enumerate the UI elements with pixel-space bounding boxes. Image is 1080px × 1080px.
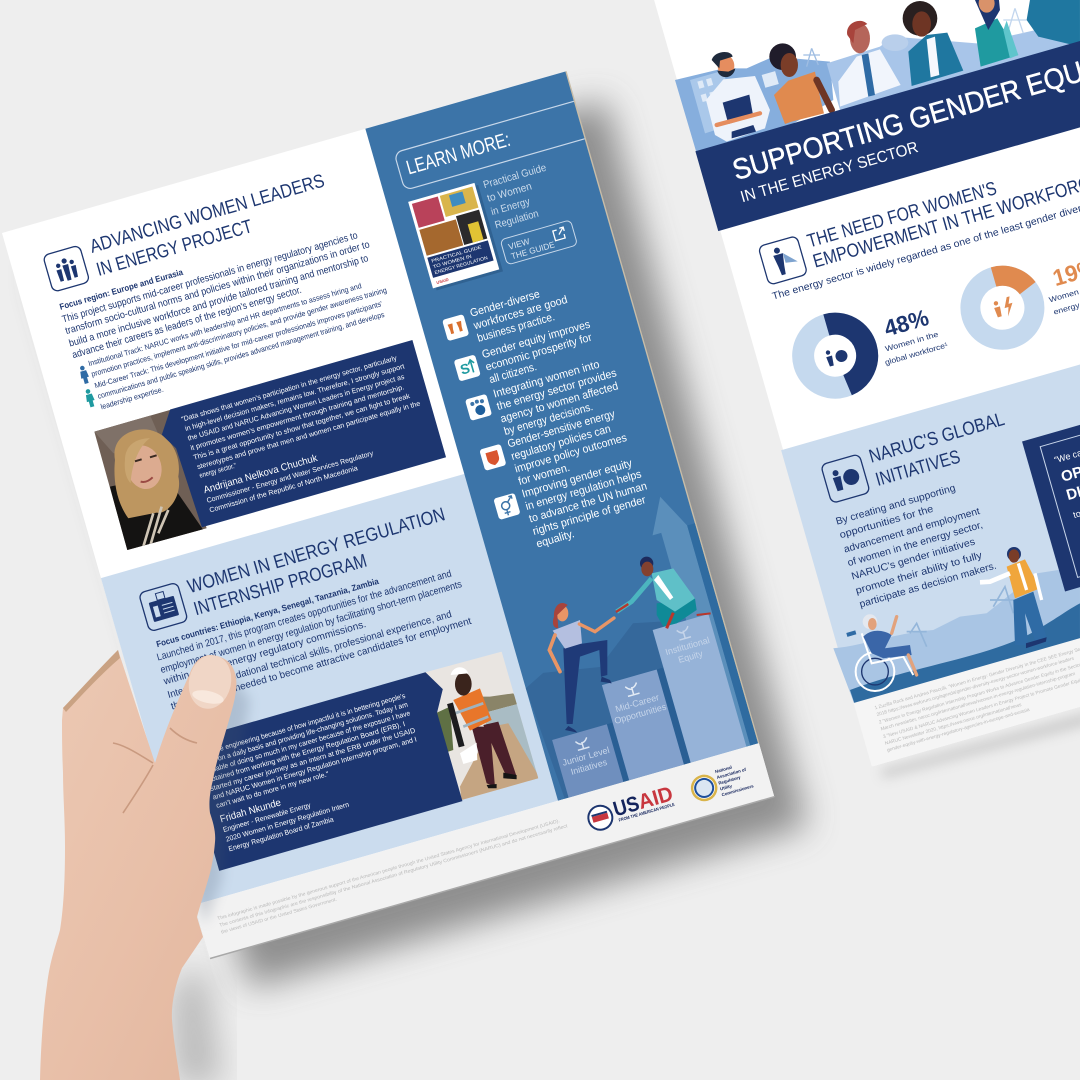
quote text: can't wait to do more in my new role.": [215, 770, 330, 810]
figure: climbing woman: [549, 603, 614, 733]
title banner: [695, 0, 1080, 231]
thumb shadow: [170, 672, 250, 925]
person: woman in hijab: [975, 0, 1018, 67]
step: mid-career: Mid-Career: [614, 692, 660, 714]
body text: By creating and supporting: [835, 483, 957, 528]
logo: NARUC: National: [714, 765, 732, 774]
guide title: Practical Guide: [482, 162, 548, 191]
body text: opportunities for the: [838, 504, 935, 541]
quote text: [180, 351, 424, 480]
quote box: [156, 340, 446, 531]
benefit: agency to women: Integrating women into: [492, 359, 601, 401]
footnotes: 2018 https://www.weforum.org/agenda/gender-diversity-energy-sector-women-workforce-leaders: [876, 656, 1075, 718]
attribution: [219, 779, 353, 853]
body text: within utilities' energy regulatory commissions.: [162, 619, 367, 688]
guide title: [482, 162, 559, 232]
attribution: Energy Regulation Board of Zambia: [228, 815, 335, 853]
step: institutional equity: [653, 614, 746, 763]
sidebar: learn more: [365, 70, 764, 801]
section: women in energy regulation background: [101, 473, 560, 905]
view the guide button: [500, 220, 578, 265]
hand holding page: [40, 650, 236, 1080]
body text: advancement and employment: [843, 506, 981, 556]
quote text: it promotes women's empowerment through training and mentorship.: [190, 383, 405, 452]
quote text: stereotypes and prove that men and women can participate equally in the: [196, 399, 421, 471]
donut chart: 48% women in global workforce: [796, 316, 875, 395]
guide title: to Women: [486, 180, 533, 205]
guide title: in Energy: [490, 195, 532, 218]
heading: IN ENERGY PROJECT: [94, 216, 255, 281]
heading: ADVANCING WOMEN LEADERS: [88, 171, 327, 258]
logo: USAID: US: [611, 792, 642, 821]
figure: reaching woman: [616, 557, 711, 628]
step: institutional equity: Institutional: [664, 635, 711, 657]
footnotes: 2 "Women in Energy Regulation Internship Program Works to Advance Gender Equity in the Sector": [878, 661, 1080, 726]
benefit: human rights: Improving gender equity: [521, 457, 634, 500]
body text: Interns gain foundational technical skills, professional experience, and: [166, 609, 453, 701]
donut chart: 19% women in energy workforce: [963, 268, 1042, 347]
benefit: human rights: to advance the UN human: [528, 480, 648, 525]
quote box: [1022, 335, 1080, 591]
quote text: "I chose engineering because of how impactful it is in bettering people's: [199, 692, 407, 758]
attribution: Commission of the Republic of North Macedonia: [208, 464, 359, 514]
benefit: agency to women: agency to women affected: [499, 380, 620, 426]
body text: This project supports mid-career professionals in energy regulatory agencies to: [61, 230, 359, 326]
track: mid-career: leadership expertise.: [100, 385, 165, 411]
quote text: and NARUC Women in Energy Regulation Internship program, and I: [212, 735, 418, 802]
body text: NARUC's gender initiatives: [850, 537, 976, 582]
benefit: human rights: equality.: [535, 528, 576, 550]
section: NARUC's global initiatives: [758, 279, 1080, 785]
person: bearded man with tablet: [706, 52, 770, 142]
benefit: economic prosperity: S: [458, 360, 472, 378]
benefit: gender-sensitive policies: [478, 407, 632, 496]
logo: NARUC: Association of: [716, 767, 747, 780]
subtitle: IN THE ENERGY SECTOR: [739, 139, 920, 206]
stat: 19%: [1040, 249, 1080, 317]
learn more box: [394, 101, 585, 190]
body text: participate as decision makers.: [858, 561, 998, 610]
heading: WOMEN IN ENERGY REGULATION: [185, 504, 448, 598]
photo: Andrijana Nelkova Chuchuk: [94, 410, 206, 550]
benefit: gender-diverse workforces: [441, 282, 573, 353]
benefit: agency to women: by energy decisions.: [503, 401, 594, 438]
quote text: [199, 692, 422, 810]
benefit: economic prosperity: economic prosperity for: [484, 332, 594, 374]
disclaimer: The contents of this infographic are the responsibility of the National Association of Regulatory Utility Commissioners (NARUC) and do not necessarily reflect: [219, 823, 569, 929]
illustration: landscape with wheelchair user and field worker: [833, 547, 1080, 720]
benefit: gender-sensitive policies: improve policy outcomes: [513, 432, 629, 476]
attribution: Commissioner - Energy and Water Services Regulatory: [206, 449, 375, 505]
body text: build a more inclusive workforce and provide tailored training and mentorship to: [68, 253, 370, 350]
track: institutional: Institutional Track: NARUC works with leadership and HR departments to assess hiring and: [87, 281, 363, 368]
icon: woman and globe: [821, 454, 870, 503]
body text: of women in the energy sector,: [846, 520, 984, 569]
quote text: the USAID and NARUC Advancing Women Leaders in Energy project as: [187, 373, 406, 443]
section: need for women's empowerment: [758, 140, 1080, 399]
person: woman in orange top: [769, 43, 832, 124]
stat: 48%: global workforce¹: [884, 340, 949, 367]
body text: [155, 567, 474, 713]
heading: [867, 409, 1014, 491]
quote box: [182, 669, 474, 871]
view the guide button: VIEW: [507, 236, 531, 252]
body text: transform socio-cultural norms and policies within their organizations in order to: [64, 239, 371, 337]
quote text: energy sector.": [199, 462, 238, 480]
heading: [88, 171, 334, 281]
footnotes: gender-equity-with-energy-regulatory-agencies-in-europe-and-eurasia: [886, 707, 1031, 754]
logo: NARUC: Regulatory: [718, 774, 742, 786]
illustration: diverse group of workers: [675, 0, 1080, 153]
footnotes: NARUC Newsletter 2020, https://www.naruc.org/international/news: [884, 702, 1023, 747]
quote text: This is a great opportunity to show that together, we can fight to break: [192, 392, 411, 462]
benefit: agency to women: the energy sector provides: [496, 367, 618, 413]
icon: ID badge: [139, 582, 188, 632]
stat: 48%: Women in the: [884, 330, 939, 353]
logo: NARUC: Commissioners: [721, 783, 755, 797]
step: mid-career: Opportunities: [613, 701, 668, 726]
attribution: 2020 Women in Energy Regulation Intern: [225, 801, 350, 844]
quote text: obtained from working with the Energy Regulation Board (ERB). I: [207, 720, 406, 784]
benefit: economic prosperity: Gender equity improves: [481, 319, 592, 361]
footnotes: [854, 532, 1080, 766]
benefit: agency to women: [464, 355, 626, 446]
logo: USAID: AID: [636, 782, 676, 814]
step: mid-career: [602, 668, 691, 780]
step: institutional equity: Equity: [677, 648, 704, 665]
benefit: gender-diverse workforces: Gender-diverse: [469, 288, 541, 320]
benefit: human rights: rights principle of gender: [531, 494, 647, 538]
icon: group of women leaders: [43, 245, 90, 292]
section: women in energy regulation internship: [137, 486, 594, 903]
attribution: Fridah Nkunde: [219, 797, 283, 825]
footnotes: March newsletter, naruc.org/international/news/women-in-energy-regulation-internship-program: [880, 671, 1076, 732]
focus region: Focus region: Europe and Eurasia: [58, 267, 184, 312]
heading: THE NEED FOR WOMEN'S: [805, 178, 999, 252]
step: junior level: [552, 723, 629, 798]
panel: front page of infographic: [609, 0, 1080, 785]
body text: employment of women in energy regulation by facilitating short-term placements: [159, 579, 463, 676]
quote text: in high-level decision makers, remains low. Therefore, I strongly support: [184, 362, 405, 433]
guide title: Regulation: [493, 208, 540, 232]
stat: 48%: [872, 301, 949, 367]
body text: Launched in 2017, this program creates opportunities for the advancement and: [156, 569, 453, 663]
disclaimer: This infographic is made possible by the generous support of the American people through the United States Agency for International Development (USAID).: [217, 818, 561, 922]
body text: promote their ability to fully: [854, 550, 983, 597]
body text: the knowledge needed to become attractive candidates for employment: [170, 616, 473, 713]
guide cover: ENERGY REGULATION: [434, 255, 489, 276]
benefit: gender-sensitive policies: Gender-sensitive energy: [506, 408, 617, 451]
track: mid-career: Mid-Career Track: This development initiative for mid-career professionals improves participants': [93, 299, 384, 390]
photo: Fridah Nkunde: [426, 652, 538, 800]
benefit: economic prosperity: [453, 319, 599, 394]
heading: INITIATIVES: [873, 447, 963, 491]
quote text: started my career journey as an intern at the ERB under the USAID: [209, 727, 416, 793]
logo: NARUC: [688, 760, 755, 805]
illustration: climbing steps: [485, 488, 764, 801]
track: institutional: promotion practices, implement anti-discriminatory policies, and provide gender awareness training: [90, 285, 388, 379]
quote text: capable of doing so much in my career because of the exposure I have: [204, 709, 411, 776]
disclaimer: the views of USAID or the United States Government.: [221, 897, 338, 936]
step: junior level: Initiatives: [569, 757, 609, 777]
body text: advance their careers as leaders of the region's energy sector.: [71, 285, 303, 361]
quote text: lives on a daily basis and providing life-changing solutions. Today I am: [202, 701, 409, 767]
benefit: human rights: [493, 455, 656, 558]
benefit: human rights: in energy regulation helps: [524, 468, 643, 513]
body text: [835, 478, 998, 610]
person: woman in teal blazer: [903, 1, 963, 86]
step: junior level: Junior Level: [561, 745, 611, 768]
figure: worker in safety vest: [980, 547, 1047, 648]
attribution: Engineer - Renewable Energy: [222, 801, 312, 834]
guide cover: PRACTICAL GUIDE: [431, 244, 482, 265]
person: man with blue tie: [838, 21, 901, 107]
panel: back page of infographic: [0, 70, 779, 961]
person: man in blue jacket: [1027, 0, 1080, 47]
heading: INTERNSHIP PROGRAM: [191, 551, 369, 620]
logo: USAID: FROM THE AMERICAN PEOPLE: [618, 802, 675, 823]
heading: NARUC'S GLOBAL: [867, 409, 1007, 468]
benefit: gender-sensitive policies: for women.: [517, 462, 571, 488]
figure: woman in wheelchair: [846, 614, 917, 691]
section: advancing women leaders: [2, 159, 455, 592]
logo: USAID: [585, 782, 677, 833]
learn more box: LEARN MORE:: [404, 129, 513, 179]
view the guide button: THE GUIDE: [510, 239, 556, 261]
figures: women helping each other climb: [549, 557, 711, 733]
benefit: gender-diverse workforces: workforces are good: [471, 294, 569, 333]
logo: NARUC: Utility: [719, 783, 733, 792]
benefit: gender-diverse workforces: business practice.: [476, 311, 556, 345]
track: mid-career: communications and public speaking skills, provides advanced management training, and develops: [97, 310, 386, 401]
attribution: Andrijana Nelkova Chuchuk: [202, 453, 320, 496]
benefit: economic prosperity: all citizens.: [488, 361, 538, 386]
guide cover: TO WOMEN IN: [432, 253, 473, 270]
guide cover: [408, 182, 503, 291]
icon: superhero woman: [758, 236, 808, 285]
arrow: [643, 490, 758, 756]
benefit: gender-sensitive policies: regulatory policies can: [510, 423, 612, 463]
stat: 48%: 48%: [881, 304, 932, 341]
guide cover: USAID: [436, 277, 449, 285]
quote text: "Data shows that women's participation in the energy sector, particularly: [180, 354, 398, 424]
heading: [185, 504, 454, 620]
focus countries: Focus countries: Ethiopia, Kenya, Senegal, Tanzania, Zambia: [155, 576, 380, 649]
footer: [195, 743, 775, 959]
